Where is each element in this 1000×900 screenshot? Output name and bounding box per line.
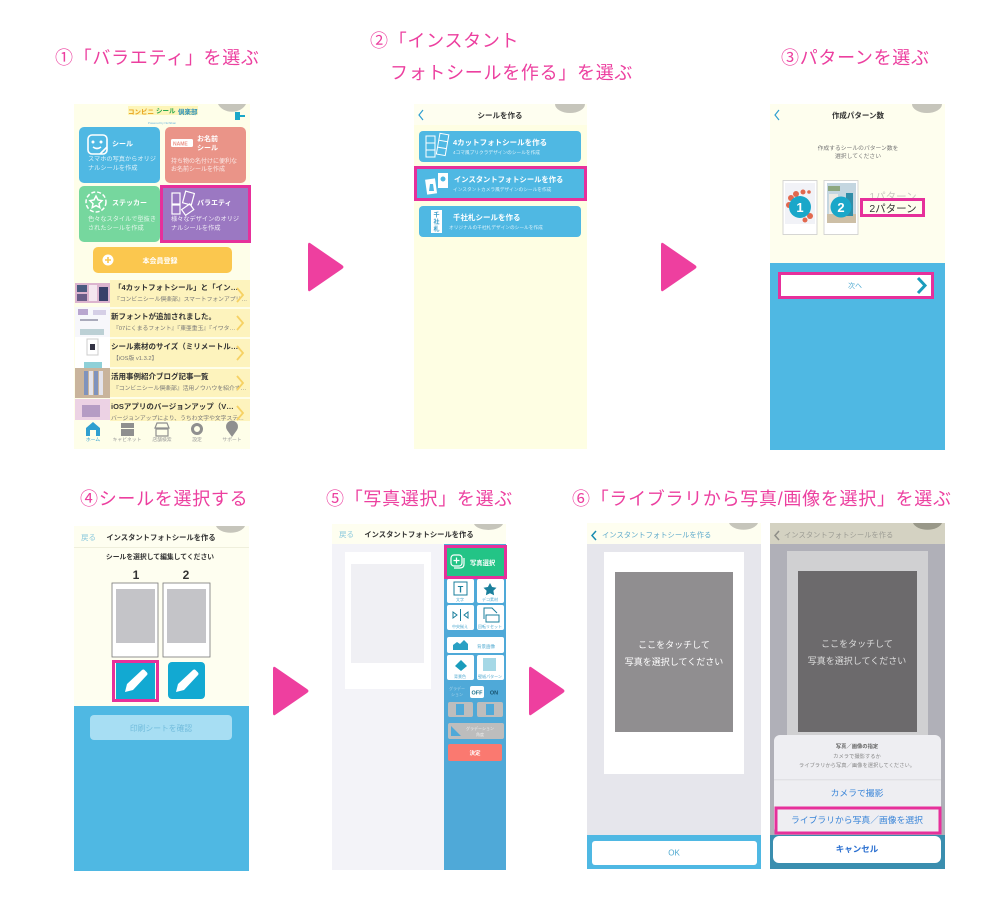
button: confirm print sheet — [90, 715, 232, 740]
icon: star — [86, 192, 106, 212]
tool: wallpaper pattern: 壁紙パターン — [478, 673, 502, 679]
tab bar: キャビネット — [113, 436, 142, 443]
icon: help pin — [226, 421, 238, 437]
dimmed sticker frame: ここをタッチして — [821, 639, 893, 649]
header: 戻る — [339, 530, 354, 539]
icon: gear — [192, 424, 202, 434]
card: variety highlighted: ナルシールを作成 — [171, 224, 220, 232]
header: 戻る — [81, 533, 96, 542]
tool: background image — [447, 637, 504, 653]
news list — [75, 280, 250, 422]
button: member registration — [93, 247, 232, 273]
instruction: シールを選択して編集してください — [106, 552, 214, 561]
header: インスタントフォトシールを作る — [784, 530, 893, 540]
panel: screen 3 pattern count — [770, 104, 945, 450]
arrow: step 4 to 5 — [273, 667, 308, 715]
panel: screen 2 sticker types — [414, 104, 587, 449]
icon: senjafuda tag: 札 — [433, 225, 440, 233]
button: next highlighted: 次へ — [848, 281, 862, 290]
button: senjafuda sticker: オリジナルの千社札デザインのシールを作成 — [449, 224, 543, 231]
app logo: 倶楽部 — [178, 107, 198, 116]
list row 5: バージョンアップにより、うちわ文字や文字ステ… — [111, 414, 244, 422]
gradation toggle: グラデー — [449, 685, 465, 691]
tool: decoration — [477, 579, 504, 603]
sticker 2 — [163, 568, 210, 657]
card: name sticker: 持ち物の名付けに便利な — [171, 157, 237, 165]
panel: screen 6b action sheet — [770, 523, 945, 869]
tool: text — [447, 579, 474, 603]
tab bar: サポート — [222, 436, 242, 443]
icon: logout — [235, 112, 245, 120]
button: member registration: 本会員登録 — [142, 256, 178, 265]
card: name sticker: お名前シールを作成 — [171, 165, 225, 173]
sample card 1: 1 — [796, 200, 804, 215]
option: library highlighted: ライブラリから写真／画像を選択 — [791, 814, 923, 825]
back chevron — [419, 110, 423, 120]
card: cut-out sticker: ステッカー — [112, 199, 147, 207]
sticker 1: 1 — [133, 568, 140, 582]
card: variety highlighted: 様々なデザインのオリジ — [171, 215, 239, 223]
panel: screen 1 home menu — [74, 104, 250, 449]
gradation options: 角度 — [476, 731, 484, 737]
icon: senjafuda tag: 社 — [433, 218, 440, 226]
list row 3: シール素材のサイズ（ミリメートル… — [111, 341, 238, 351]
bottom bar — [770, 835, 945, 869]
gradation toggle — [449, 685, 498, 698]
gradation toggle: OFF — [472, 690, 483, 696]
icon: smiling seal — [88, 135, 107, 154]
profile bubble — [474, 524, 503, 530]
tab bar: 設定 — [192, 436, 202, 443]
heading: step 5: ⑤「写真選択」を選ぶ — [326, 489, 513, 509]
button: instant photo sticker highlighted: インスタントカメラ風デザインのシールを作成 — [453, 186, 552, 193]
option: library highlighted — [776, 808, 940, 833]
sample card 2 — [824, 180, 858, 234]
option: 2 patterns highlighted: 2パターン — [869, 203, 917, 215]
arrow: step 5 to 6 — [529, 667, 564, 715]
app logo: Powered by Nichiban — [148, 121, 177, 125]
profile bubble — [216, 526, 245, 533]
button: instant photo sticker highlighted: インスタントフォトシールを作る — [454, 175, 563, 184]
tool: text: 文字 — [456, 596, 464, 602]
list row 4: 活用事例紹介ブログ記事一覧 — [111, 371, 209, 381]
instructions — [818, 144, 899, 160]
sticker preview — [345, 552, 431, 689]
gradation toggle: ON — [490, 690, 498, 696]
heading: step 2: ②「インスタント — [370, 31, 519, 51]
app logo: コンビニ — [128, 107, 154, 116]
instructions: 選択してください — [835, 152, 881, 160]
sticker 2: 2 — [183, 568, 190, 582]
icon: instant photos — [425, 173, 448, 195]
panel: screen 6a photo prompt — [587, 523, 761, 869]
gradation toggle: ション — [451, 692, 463, 697]
card: sticker — [79, 127, 160, 183]
tool: decoration: デコ素材 — [482, 596, 498, 602]
gradation options — [448, 702, 504, 739]
header — [74, 533, 249, 548]
button: next highlighted — [780, 274, 932, 298]
action sheet: カメラで撮影するか — [833, 752, 882, 760]
button: confirm print sheet: 印刷シートを確認 — [130, 723, 192, 733]
list row 2 — [75, 307, 250, 337]
panel: screen 5 editor — [332, 524, 506, 870]
arrow: step 1 to 2 — [308, 243, 344, 291]
button: decide: 決定 — [469, 749, 481, 757]
icon: store — [155, 423, 169, 436]
heading: step 1: ①「バラエティ」を選ぶ — [55, 48, 260, 68]
header: インスタントフォトシールを作る — [602, 530, 711, 540]
tool: center align: 中央揃え — [452, 623, 468, 629]
icon: home — [86, 422, 100, 436]
list row 2: 『07にくまるフォント』『東亜重玉』『イワタ… — [113, 324, 235, 332]
card: sticker: シール — [112, 141, 133, 148]
tool: rotate reset — [477, 605, 504, 630]
arrow: step 2 to 3 — [661, 243, 696, 291]
tool: background color — [447, 655, 474, 680]
sample card 1 — [783, 180, 817, 234]
profile bubble — [912, 104, 942, 113]
card: variety highlighted: バラエティ — [197, 199, 232, 207]
card: name sticker: シール — [197, 145, 218, 152]
profile bubble — [555, 104, 585, 113]
button: cancel: キャンセル — [836, 844, 879, 854]
dimmed sticker frame: 写真を選択してください — [808, 655, 906, 666]
profile bubble — [913, 523, 942, 530]
tab bar — [74, 421, 250, 449]
action sheet: 写真／画像の指定 — [836, 742, 879, 750]
screen title: シールを作る — [478, 110, 522, 120]
dimmed sticker frame — [787, 551, 928, 751]
list row 1 — [75, 280, 250, 307]
icon: pencil — [176, 670, 198, 692]
action sheet — [774, 735, 941, 834]
tab bar: 店舗検索 — [152, 436, 172, 443]
icon: photo cards — [172, 191, 194, 215]
gradation options: グラデーション — [466, 725, 494, 731]
action sheet: ライブラリから写真／画像を選択してください。 — [799, 761, 915, 769]
list row 1: 『コンビニシール倶楽部』スマートフォンアプリ… — [114, 295, 247, 303]
list row 3: 【iOS版 v1.3.2】 — [113, 354, 157, 362]
heading: step 6: ⑥「ライブラリから写真/画像を選択」を選ぶ — [572, 488, 952, 509]
heading: step 3: ③パターンを選ぶ — [781, 48, 930, 68]
button: 4-cut photo sticker: 4カットフォトシールを作る — [453, 137, 547, 147]
button: OK: OK — [668, 848, 680, 858]
icon: pencil — [125, 670, 148, 692]
button: cancel — [773, 836, 941, 863]
icon: add photo — [451, 555, 464, 568]
tool: background color: 背景色 — [454, 673, 466, 679]
sticker frame: ここをタッチして — [638, 640, 710, 650]
card: cut-out sticker — [79, 186, 160, 242]
button: decide — [448, 744, 502, 761]
option: 2 patterns highlighted — [862, 200, 924, 216]
tool: center align — [447, 605, 474, 630]
sticker 1 — [112, 568, 158, 657]
edit button 2 — [168, 662, 205, 699]
card: name sticker: お名前 — [197, 134, 218, 143]
card: sticker: ナルシールを作成 — [88, 164, 138, 172]
tool: background image: 背景画像 — [477, 643, 495, 650]
button: OK — [592, 841, 757, 865]
list row 5 — [75, 399, 250, 422]
card: name sticker — [165, 127, 246, 183]
back chevron — [775, 110, 779, 120]
profile bubble — [218, 104, 246, 112]
button: select photo highlighted — [446, 546, 506, 578]
screen title: 作成パターン数 — [832, 110, 885, 120]
edit button 1 highlighted — [114, 662, 158, 700]
profile bubble — [729, 523, 758, 530]
sample card 2: 2 — [837, 200, 845, 215]
button: instant photo sticker highlighted — [416, 168, 586, 200]
list row 1: 「4カットフォトシール」と「イン… — [114, 283, 238, 292]
list row 4 — [75, 368, 250, 398]
app logo — [128, 106, 198, 125]
tool: text: T — [458, 584, 464, 594]
panel: screen 4 select sticker — [74, 526, 249, 871]
sticker frame: 写真を選択してください — [625, 656, 723, 667]
sticker frame — [604, 552, 744, 774]
icon: senjafuda tag — [431, 210, 442, 233]
list row 3 — [75, 337, 250, 368]
heading: step 4: ④シールを選択する — [80, 489, 248, 509]
list row 4: 『コンビニシール倶楽部』活用ノウハウを紹介す… — [113, 384, 247, 392]
list row 5: iOSアプリのバージョンアップ（V… — [111, 402, 234, 411]
heading: step 2: フォトシールを作る」を選ぶ — [390, 63, 633, 83]
tool panel — [444, 544, 506, 870]
bottom bar — [587, 835, 761, 869]
card: cut-out sticker: 色々なスタイルで型抜き — [88, 215, 156, 223]
option: 1 pattern: 1パターン — [869, 191, 917, 203]
button: senjafuda sticker: 千社札シールを作る — [453, 212, 520, 222]
icon: name tag: NAME — [173, 142, 188, 148]
card: cut-out sticker: されたシールを作成 — [88, 224, 144, 232]
button: 4-cut photo sticker: 4コマ風プリクラデザインのシールを作成 — [453, 149, 540, 156]
instructions: 作成するシールのパターン数を — [818, 144, 899, 152]
app logo: シール — [156, 108, 176, 115]
button: select photo highlighted: 写真選択 — [470, 558, 496, 567]
card: variety highlighted — [162, 186, 250, 242]
tool: wallpaper pattern — [477, 655, 504, 680]
action sheet: カメラで撮影 — [831, 787, 884, 798]
list row 2: 新フォントが追加されました。 — [111, 311, 216, 321]
heading: step 2 — [370, 31, 633, 83]
card: sticker: スマホの写真からオリジ — [88, 155, 156, 163]
icon: senjafuda tag: 千 — [433, 211, 440, 219]
header: インスタントフォトシールを作る — [364, 530, 474, 539]
button: 4-cut photo sticker — [419, 131, 581, 162]
header: インスタントフォトシールを作る — [106, 533, 216, 542]
icon: cabinet — [121, 423, 134, 436]
tool: rotate reset: 回転リセット — [478, 624, 502, 629]
button: senjafuda sticker — [419, 206, 581, 237]
tab bar: ホーム — [86, 437, 100, 443]
icon: 4-cut strips — [426, 133, 449, 157]
